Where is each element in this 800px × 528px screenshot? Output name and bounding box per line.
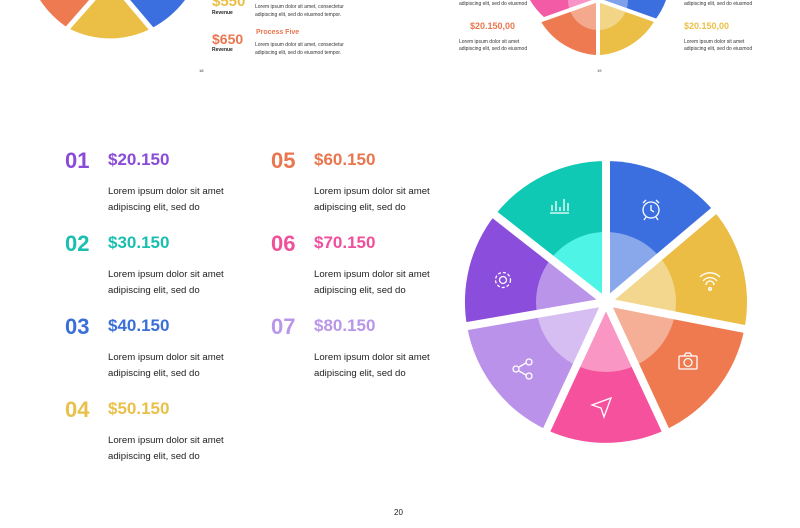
item 07: $80.150 <box>314 316 375 335</box>
partial text right: $20.150,00 <box>470 21 515 31</box>
item 01: Lorem ipsum dolor sit amet <box>108 186 224 197</box>
page number: 20 <box>394 508 403 517</box>
partial pie right <box>530 0 666 60</box>
partial text left: Revenue <box>212 47 233 53</box>
item 04: $50.150 <box>108 399 169 418</box>
item 06: $70.150 <box>314 233 375 252</box>
partial text right: adipiscing elit, sed do eiusmod <box>459 1 527 7</box>
item 07: 07 <box>271 314 295 339</box>
icon: wifi <box>700 273 720 290</box>
item 03: 03 <box>65 314 89 339</box>
partial text left: Process Five <box>256 29 299 36</box>
icon: paper plane <box>592 398 611 417</box>
partial text left: adipiscing elit, sed do eiusmod tempor. <box>255 50 341 56</box>
item 03: $40.150 <box>108 316 169 335</box>
item 03 <box>65 314 224 379</box>
item 05: adipiscing elit, sed do <box>314 202 406 213</box>
partial text right: $20.150,00 <box>684 21 729 31</box>
partial text right: 19 <box>597 68 602 73</box>
partial text right <box>459 1 752 73</box>
partial text left: $650 <box>212 31 243 47</box>
item 06 <box>271 231 430 296</box>
icon: share <box>513 359 532 379</box>
item 02: adipiscing elit, sed do <box>108 285 200 296</box>
item 07: adipiscing elit, sed do <box>314 368 406 379</box>
partial text right: Lorem ipsum dolor sit amet <box>684 39 745 45</box>
item 01: adipiscing elit, sed do <box>108 202 200 213</box>
partial text left: Lorem ipsum dolor sit amet, consectetur <box>255 4 344 10</box>
item 01: 01 <box>65 148 89 173</box>
icon: gear <box>496 272 510 288</box>
item 01: $20.150 <box>108 150 169 169</box>
item 05: $60.150 <box>314 150 375 169</box>
item 02: 02 <box>65 231 89 256</box>
item 02: $30.150 <box>108 233 169 252</box>
item 05: Lorem ipsum dolor sit amet <box>314 186 430 197</box>
item 02 <box>65 231 224 296</box>
partial text right: adipiscing elit, sed do eiusmod <box>684 1 752 7</box>
partial text right: adipiscing elit, sed do eiusmod <box>459 46 527 52</box>
partial text right: Lorem ipsum dolor sit amet <box>459 39 520 45</box>
icon: alarm clock <box>643 200 659 220</box>
item 01 <box>65 148 224 213</box>
item 05: 05 <box>271 148 295 173</box>
partial text left: Revenue <box>212 10 233 16</box>
item 02: Lorem ipsum dolor sit amet <box>108 269 224 280</box>
item 06: adipiscing elit, sed do <box>314 285 406 296</box>
partial text left: adipiscing elit, sed do eiusmod tempor. <box>255 12 341 18</box>
item 07 <box>271 314 430 379</box>
item 06: Lorem ipsum dolor sit amet <box>314 269 430 280</box>
icon: camera <box>679 353 697 369</box>
item 03: adipiscing elit, sed do <box>108 368 200 379</box>
partial text right: adipiscing elit, sed do eiusmod <box>684 46 752 52</box>
item 03: Lorem ipsum dolor sit amet <box>108 352 224 363</box>
top previous slides fragment <box>40 0 752 73</box>
item 07: Lorem ipsum dolor sit amet <box>314 352 430 363</box>
item 06: 06 <box>271 231 295 256</box>
item 05 <box>271 148 430 213</box>
partial text left: 18 <box>199 68 204 73</box>
partial text left: Lorem ipsum dolor sit amet, consectetur <box>255 42 344 48</box>
item 04: adipiscing elit, sed do <box>108 451 200 462</box>
icon: bar chart <box>550 199 569 213</box>
item 04: Lorem ipsum dolor sit amet <box>108 435 224 446</box>
partial text left <box>199 0 344 73</box>
partial pie left <box>40 0 185 38</box>
item 04 <box>65 397 224 462</box>
item 04: 04 <box>65 397 89 422</box>
